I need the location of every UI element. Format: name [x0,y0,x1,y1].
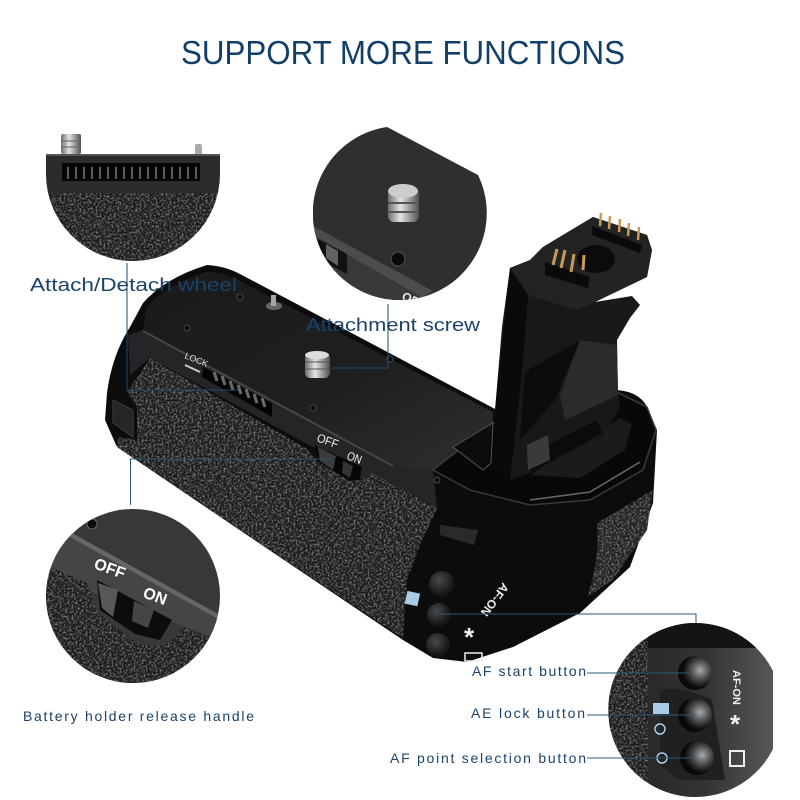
inset: release handle [46,509,225,690]
tray inner panel [530,418,632,478]
adjustment wheel: LOCK [183,351,210,369]
inset: buttons: * [730,709,741,739]
wheel slot [62,163,200,181]
inset: buttons [600,623,783,797]
band [46,533,220,640]
label: battery holder: Battery holder release handle [23,708,254,724]
OFF ON release switch: ON [345,449,364,467]
function buttons: * [464,622,475,652]
tray stalk [453,213,652,480]
attachment screw [305,351,330,378]
leader line: AE lock [587,714,695,716]
title: SUPPORT MORE FUNCTIONS [181,34,625,71]
OFF ON release switch [314,431,364,479]
leader line: button inset [440,614,696,623]
contact pins right [592,226,642,253]
button well [660,689,725,780]
inset: attachment screw [313,127,487,309]
leader line: AF point [587,757,695,759]
body edge band [313,226,433,304]
plate screw holes [184,294,440,483]
inset: attach/detach wheel [46,155,220,265]
side panel right [587,490,653,597]
leader line: AF start [587,672,693,674]
contact pins left [545,262,590,288]
label: AF start: AF start button [472,663,586,679]
inset: release handle: ON [141,585,169,609]
buttons [678,656,712,690]
inset: attachment screw: OF [400,289,421,309]
clip at foot [453,423,493,470]
grip body [105,265,657,662]
rubber side [608,639,648,783]
locating pin [266,295,282,310]
left blade [492,268,528,480]
label: attach/detach wheel: Attach/Detach wheel [30,275,237,295]
hole [391,252,405,266]
leather texture [46,193,220,265]
switch labels: OFF [92,556,128,583]
release latch [113,400,133,437]
plate edge band [128,330,437,508]
head top [510,217,652,310]
inner highlights [560,340,618,420]
top plate [143,272,493,470]
OFF ON release switch: OFF [315,431,340,451]
inset screw top [46,134,220,156]
function buttons [405,571,512,661]
battery grip product photo [105,213,657,662]
tray rim highlight [530,462,640,500]
function buttons: AF-ON [478,580,512,619]
leader line: handle [130,459,332,505]
textured hand grip [117,358,437,638]
plate edge highlight [143,331,393,466]
threaded screw [388,188,419,222]
adjustment wheel [183,351,272,417]
leader line: wheel [127,263,238,390]
label: AE lock: AE lock button [471,705,585,721]
switch slot [318,239,347,274]
leader line: screw [328,304,388,368]
rubber texture [46,567,210,683]
switch recess [97,580,172,640]
label: attachment screw: Attachment screw [306,315,481,335]
label: AF point: AF point selection button [390,750,586,766]
battery tray [433,392,656,505]
highlight above buttons [440,525,478,545]
labels on camera: AF-ON [730,670,742,705]
